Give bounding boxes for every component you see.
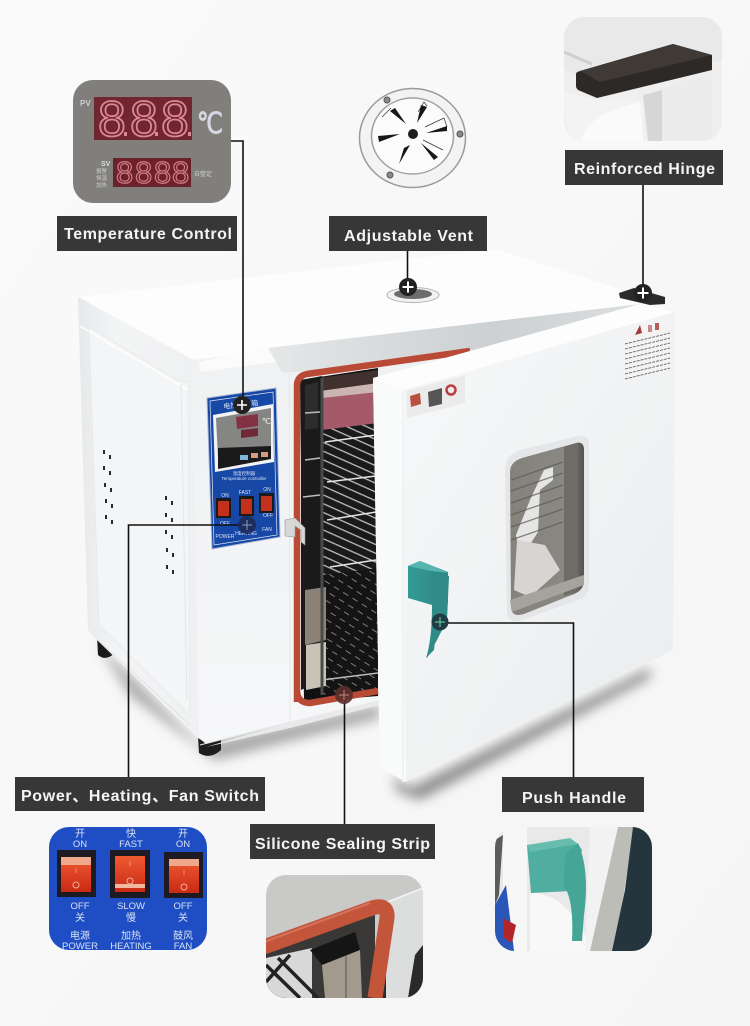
photo: reinforced hinge — [564, 17, 722, 141]
panel switches — [216, 493, 274, 518]
panel: rocker switches: ON — [176, 839, 190, 850]
panel: temperature display: 恒温 — [96, 174, 108, 182]
PV digits — [98, 91, 191, 147]
label: Push Handle: Push Handle — [522, 790, 626, 807]
warning labels — [406, 375, 465, 418]
label: Silicone Sealing Strip: Silicone Sealing Strip — [255, 836, 430, 853]
control panel: 电热 箱 — [223, 398, 259, 411]
control panel: OFF — [220, 521, 230, 527]
SV digits — [116, 155, 189, 190]
switch: power — [57, 850, 96, 897]
label: Power, Heating, Fan Switch: Power、Heating、Fan Switch — [21, 788, 259, 805]
SV digits: 8 — [172, 155, 189, 190]
control panel: HEATING — [235, 531, 257, 537]
door handle — [408, 561, 449, 658]
control panel: OFF — [263, 513, 273, 519]
label: Push Handle — [502, 777, 644, 812]
degree symbol: ℃ — [197, 108, 223, 140]
panel: rocker switches — [49, 827, 207, 952]
panel: rocker switches: FAN — [174, 941, 192, 952]
control panel: ON — [263, 487, 271, 493]
label: Adjustable Vent — [329, 216, 487, 251]
SV digits: 8 — [154, 155, 171, 190]
oven door — [373, 304, 675, 782]
icon: adjustable vent detail — [360, 88, 466, 188]
switch: fan — [164, 852, 203, 898]
safety notice sticker — [623, 319, 671, 383]
SV digits: 8 — [135, 155, 152, 190]
panel: rocker switches: 快 — [126, 828, 136, 840]
marker: temperature control — [233, 396, 251, 414]
oven side face — [78, 297, 206, 743]
panel: rocker switches: 电源 — [70, 929, 90, 942]
label: Temperature Control — [57, 216, 237, 251]
oven feet — [97, 636, 221, 756]
control panel — [207, 388, 280, 549]
oven top face — [78, 249, 640, 360]
panel: rocker switches: 鼓风 — [173, 929, 193, 942]
photo: silicone sealing strip — [264, 875, 423, 998]
label: Reinforced Hinge: Reinforced Hinge — [574, 161, 715, 178]
panel: temperature display — [73, 80, 231, 203]
control panel: FAST — [239, 490, 251, 496]
panel: rocker switches: 开 — [178, 829, 188, 840]
control panel: 温度控制器 — [233, 470, 256, 477]
panel: rocker switches: 关 — [75, 911, 85, 924]
PV digits: 8 — [98, 91, 126, 147]
panel: rocker switches: FAST — [119, 839, 143, 850]
panel: rocker switches: SLOW — [117, 901, 145, 912]
panel: temperature display: 加热 — [96, 181, 108, 189]
panel: rocker switches: POWER — [62, 941, 98, 952]
control panel: FAN — [262, 527, 272, 533]
panel: rocker switches: 开 — [75, 829, 85, 840]
panel: rocker switches: ON — [73, 839, 87, 850]
control panel: ℃ — [262, 417, 271, 426]
panel: rocker switches: OFF — [174, 901, 193, 912]
panel: rocker switches: OFF — [70, 901, 90, 912]
marker: hinge — [634, 284, 652, 302]
marker: switch — [238, 516, 256, 534]
side vent holes — [103, 450, 174, 574]
door window — [505, 436, 589, 621]
SV digits: 8 — [116, 155, 133, 190]
control panel: POWER — [216, 534, 235, 540]
panel: temperature display: SV — [101, 161, 111, 168]
red silicone sealing gasket — [297, 351, 470, 703]
panel: rocker switches: HEATING — [110, 941, 152, 952]
oven vent on top — [387, 288, 439, 302]
panel: rocker switches: 关 — [178, 911, 188, 924]
oven shadows — [95, 640, 650, 800]
marker: vent — [399, 278, 417, 296]
switch: heating — [110, 850, 150, 898]
control panel: Temperature controller — [221, 476, 267, 481]
label: Adjustable Vent: Adjustable Vent — [344, 228, 474, 245]
marker: handle — [432, 614, 448, 630]
hinge on top — [619, 288, 665, 305]
panel: temperature display: 报警 — [96, 167, 108, 175]
control panel: ON — [221, 493, 229, 499]
panel: rocker switches: 慢 — [126, 912, 136, 924]
panel: rocker switches: 加热 — [121, 929, 141, 942]
panel: temperature display: PV — [80, 99, 91, 108]
leader lines — [128, 141, 643, 824]
PV digits: 8 — [130, 91, 158, 147]
PV digits: 8 — [161, 91, 189, 147]
marker: sealing strip — [335, 686, 353, 704]
door hinge bracket — [285, 518, 305, 545]
oven interior — [300, 362, 400, 702]
panel: temperature display: 自整定 — [194, 170, 212, 178]
photo: push handle — [495, 827, 652, 951]
label: Power, Heating, Fan Switch — [15, 777, 265, 811]
oven front face — [192, 304, 640, 747]
label: Temperature Control: Temperature Control — [64, 226, 232, 243]
label: Reinforced Hinge — [565, 150, 723, 185]
label: Silicone Sealing Strip — [250, 824, 435, 859]
